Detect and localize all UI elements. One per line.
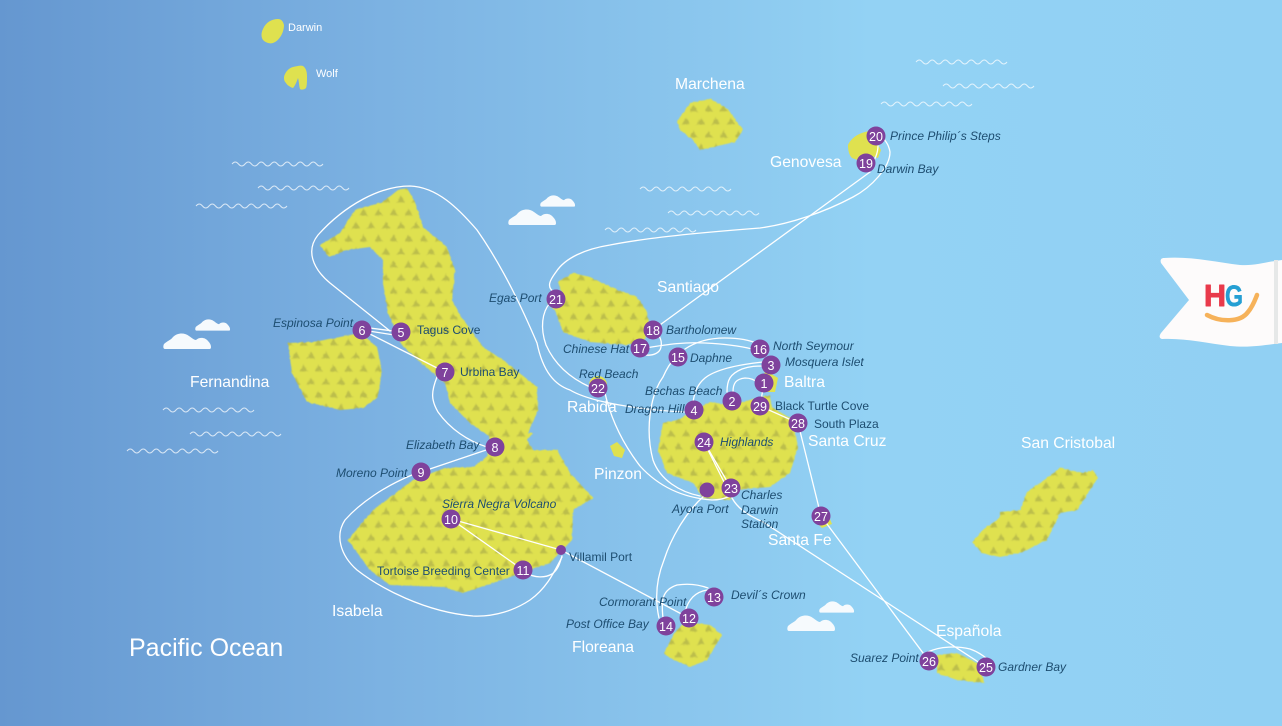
stop 4 bbox=[684, 400, 704, 420]
name: Santiago: Santiago bbox=[657, 279, 719, 296]
label: Egas Port bbox=[489, 291, 542, 305]
island: Pinzon bbox=[610, 442, 625, 458]
island names bbox=[129, 22, 1115, 662]
stop 17 bbox=[630, 338, 650, 358]
name: San Cristobal: San Cristobal bbox=[1021, 435, 1115, 452]
name: Wolf: Wolf bbox=[316, 68, 339, 80]
stop 17: 17 bbox=[633, 342, 647, 356]
label: Gardner Bay bbox=[998, 660, 1067, 674]
stop 21: 21 bbox=[549, 293, 563, 307]
name: Baltra: Baltra bbox=[784, 374, 825, 391]
stop 11 bbox=[514, 560, 532, 580]
stop 16 bbox=[750, 340, 770, 358]
name: Pacific Ocean: Pacific Ocean bbox=[129, 634, 283, 662]
numbered stop markers bbox=[352, 126, 996, 676]
stop 12 bbox=[680, 608, 698, 628]
logo smile bbox=[1207, 295, 1257, 320]
stop 10 bbox=[442, 510, 460, 528]
island: Espanola bbox=[937, 653, 985, 683]
stop 19: 19 bbox=[859, 157, 873, 171]
label: Charles bbox=[741, 488, 782, 502]
small plain islands bbox=[262, 19, 881, 528]
stop 8: 8 bbox=[492, 441, 499, 455]
stop 14 bbox=[656, 616, 676, 636]
label: Post Office Bay bbox=[566, 617, 650, 631]
label: Highlands bbox=[720, 435, 773, 449]
label: Black Turtle Cove bbox=[775, 399, 869, 413]
stop 16: 16 bbox=[753, 343, 767, 357]
decorative waves bbox=[127, 60, 1034, 453]
name: Darwin: Darwin bbox=[288, 22, 322, 34]
label: Red Beach bbox=[579, 367, 639, 381]
stop 13 bbox=[704, 588, 724, 606]
island: Floreana bbox=[664, 622, 722, 667]
visitor site labels bbox=[273, 129, 1067, 674]
stop 5 bbox=[392, 322, 410, 342]
stop 7: 7 bbox=[442, 366, 449, 380]
label: Villamil Port bbox=[569, 550, 633, 564]
island: San Cristobal bbox=[972, 468, 1098, 557]
stop 26: 26 bbox=[922, 655, 936, 669]
label: Station bbox=[741, 517, 779, 531]
island: Isabela bbox=[320, 188, 593, 593]
stop 15 bbox=[668, 348, 688, 366]
name: Floreana: Floreana bbox=[572, 639, 634, 656]
stop 23: 23 bbox=[724, 482, 738, 496]
label: Daphne bbox=[690, 351, 732, 365]
label: Urbina Bay bbox=[460, 365, 519, 379]
stop 9 bbox=[412, 462, 430, 482]
stop 25 bbox=[976, 658, 996, 676]
stop 26 bbox=[920, 652, 938, 670]
stop 14: 14 bbox=[659, 620, 673, 634]
stop 6: 6 bbox=[359, 324, 366, 338]
stop 1 bbox=[754, 374, 774, 392]
label: Cormorant Point bbox=[599, 595, 687, 609]
label: Bechas Beach bbox=[645, 384, 723, 398]
island: Marchena bbox=[677, 99, 743, 150]
name: Santa Fe: Santa Fe bbox=[768, 532, 832, 549]
flag shape bbox=[1160, 258, 1282, 347]
island: Santa Fe bbox=[812, 510, 832, 528]
stop 22 bbox=[588, 378, 608, 398]
logo letter H: H bbox=[1204, 278, 1226, 313]
stop 13: 13 bbox=[707, 591, 721, 605]
stop 28 bbox=[788, 414, 808, 432]
logo flag bbox=[1160, 258, 1282, 347]
stop 25: 25 bbox=[979, 661, 993, 675]
stop 28: 28 bbox=[791, 417, 805, 431]
stop 12: 12 bbox=[682, 612, 696, 626]
label: Ayora Port bbox=[671, 502, 729, 516]
marker: Villamil Port bbox=[556, 545, 566, 555]
stop 3 bbox=[762, 356, 780, 374]
label: Elizabeth Bay bbox=[406, 438, 480, 452]
stop 7 bbox=[436, 362, 454, 382]
stop 5: 5 bbox=[398, 326, 405, 340]
label: Prince Philip´s Steps bbox=[890, 129, 1001, 143]
stop 21 bbox=[546, 290, 566, 308]
name: Marchena: Marchena bbox=[675, 76, 745, 93]
stop 1: 1 bbox=[761, 377, 768, 391]
island: Darwin bbox=[262, 19, 284, 43]
island: Santa Cruz bbox=[658, 395, 798, 500]
island: Fernandina bbox=[288, 333, 382, 410]
label: Moreno Point bbox=[336, 466, 408, 480]
island: Santiago bbox=[547, 273, 650, 345]
islands bbox=[288, 99, 1098, 683]
island: Baltra bbox=[762, 370, 778, 392]
label: South Plaza bbox=[814, 417, 879, 431]
flag pole strip bbox=[1274, 260, 1278, 344]
label: Sierra Negra Volcano bbox=[442, 497, 557, 511]
cruise routes bbox=[312, 139, 986, 667]
label: Mosquera Islet bbox=[785, 355, 864, 369]
name: Pinzon: Pinzon bbox=[594, 466, 642, 483]
name: Genovesa: Genovesa bbox=[770, 154, 842, 171]
stop 4: 4 bbox=[691, 404, 698, 418]
stop 11: 11 bbox=[517, 564, 530, 578]
stop 24: 24 bbox=[697, 436, 711, 450]
label: Espinosa Point bbox=[273, 316, 354, 330]
stop 29 bbox=[750, 396, 770, 416]
island: Rabida bbox=[589, 376, 607, 394]
stop 3: 3 bbox=[768, 359, 775, 373]
stop 10: 10 bbox=[444, 513, 458, 527]
stop 29: 29 bbox=[753, 400, 767, 414]
stop 8 bbox=[486, 438, 504, 456]
label: Darwin Bay bbox=[877, 162, 939, 176]
stop 6 bbox=[352, 320, 372, 340]
stop 9: 9 bbox=[418, 466, 425, 480]
stop 22: 22 bbox=[591, 382, 605, 396]
label: Tortoise Breeding Center bbox=[377, 564, 510, 578]
stop 20: 20 bbox=[869, 130, 883, 144]
stop 20 bbox=[866, 126, 886, 146]
island: Genovesa bbox=[848, 131, 881, 161]
stop 24 bbox=[694, 432, 714, 452]
label: Darwin bbox=[741, 503, 779, 517]
stop 19 bbox=[856, 154, 876, 172]
label: North Seymour bbox=[773, 339, 855, 353]
stop 27: 27 bbox=[814, 510, 828, 524]
name: Fernandina: Fernandina bbox=[190, 374, 270, 391]
label: Bartholomew bbox=[666, 323, 737, 337]
stop 15: 15 bbox=[671, 351, 685, 365]
stop 18: 18 bbox=[646, 324, 660, 338]
stop 27 bbox=[812, 506, 830, 526]
label: Chinese Hat bbox=[563, 342, 630, 356]
name: Santa Cruz: Santa Cruz bbox=[808, 433, 887, 450]
marker: Ayora Port bbox=[700, 482, 714, 498]
stop 2 bbox=[722, 392, 742, 410]
island: Wolf bbox=[284, 66, 307, 90]
label: Devil´s Crown bbox=[731, 588, 806, 602]
logo letter G: G bbox=[1225, 280, 1243, 313]
stop 23 bbox=[722, 478, 740, 498]
label: Suarez Point bbox=[850, 651, 919, 665]
name: Isabela: Isabela bbox=[332, 603, 383, 620]
label: Dragon Hill bbox=[625, 402, 685, 416]
name: Rabida: Rabida bbox=[567, 399, 617, 416]
clouds bbox=[163, 195, 854, 631]
stop 18 bbox=[644, 320, 662, 340]
name: Espanola: Española bbox=[936, 623, 1002, 640]
label: Tagus Cove bbox=[417, 323, 481, 337]
stop 2: 2 bbox=[729, 395, 736, 409]
